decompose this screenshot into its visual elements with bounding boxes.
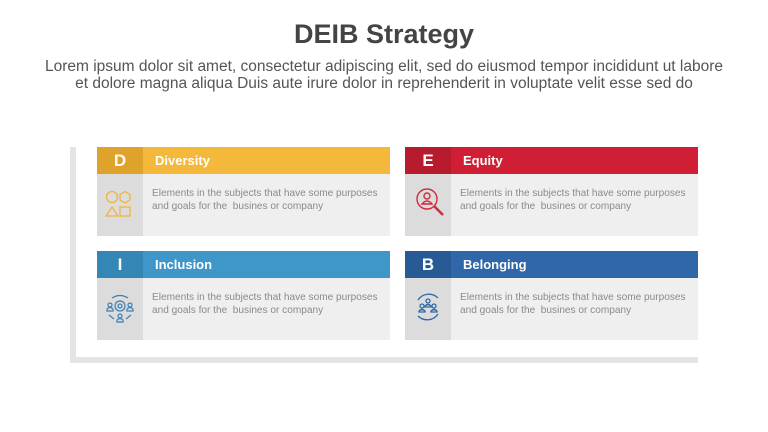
header: diversity	[97, 147, 390, 174]
header: inclusion: I	[118, 255, 122, 274]
text	[460, 292, 686, 316]
header: diversity: D	[114, 151, 126, 170]
text: and goals for the busines or company	[152, 305, 323, 316]
panel: diversity	[97, 147, 390, 236]
header: inclusion: Inclusion	[155, 257, 212, 272]
text: and goals for the busines or company	[152, 201, 323, 212]
icon: group cycle	[418, 294, 438, 320]
text: Elements in the subjects that have some purposes	[460, 188, 686, 199]
header: belonging: B	[422, 255, 434, 274]
icon: team gear	[106, 294, 134, 323]
text: Elements in the subjects that have some purposes	[152, 292, 378, 303]
text: and goals for the busines or company	[460, 201, 631, 212]
subtitle	[45, 58, 723, 92]
text: and goals for the busines or company	[460, 305, 631, 316]
header: belonging: Belonging	[463, 257, 527, 272]
text: Elements in the subjects that have some purposes	[460, 292, 686, 303]
text	[460, 188, 686, 212]
icon: shapes	[104, 190, 131, 217]
header: equity	[405, 147, 698, 174]
header: inclusion	[97, 251, 390, 278]
text: Elements in the subjects that have some purposes	[152, 188, 378, 199]
panel: inclusion	[97, 251, 390, 340]
icon: magnifier person	[416, 188, 444, 216]
panel: belonging	[405, 251, 698, 340]
header: equity: Equity	[463, 153, 503, 168]
title: DEIB Strategy	[294, 19, 474, 49]
panel: equity	[405, 147, 698, 236]
header: equity: E	[422, 151, 434, 170]
header: belonging	[405, 251, 698, 278]
text	[152, 292, 378, 316]
text	[152, 188, 378, 212]
subtitle: Lorem ipsum dolor sit amet, consectetur adipiscing elit, sed do eiusmod tempor incididunt ut labore	[45, 58, 723, 75]
header: diversity: Diversity	[155, 153, 210, 168]
frame	[70, 147, 76, 363]
subtitle: et dolore magna aliqua Duis aute irure dolor in reprehenderit in voluptate velit esse sed do	[75, 75, 693, 92]
